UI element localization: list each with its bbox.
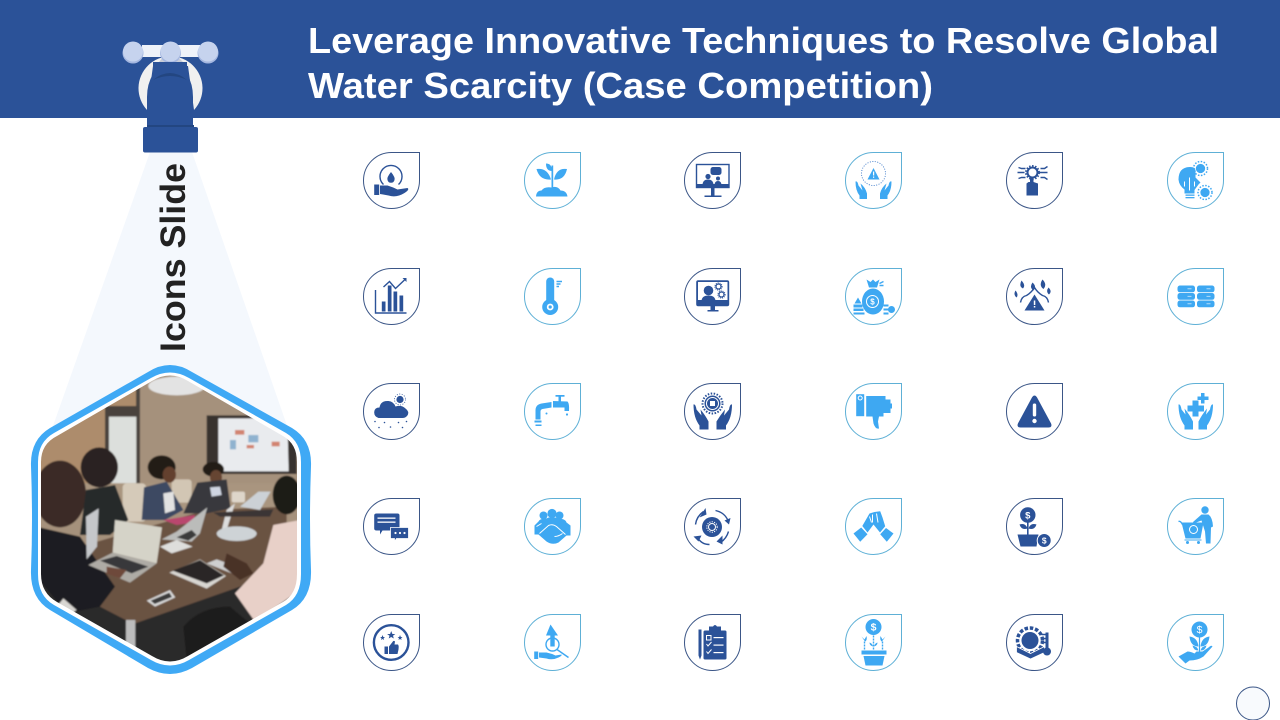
icon: hands with medical cross — [1168, 384, 1224, 440]
hexagon photo frame — [30, 365, 311, 674]
icon: money plant in pot — [1006, 498, 1062, 554]
icon: dollar plant pot — [846, 614, 902, 670]
icon: money bag: $ — [870, 298, 875, 306]
icon: thumbs down — [846, 384, 902, 440]
page number circle — [1236, 687, 1270, 720]
icon: dripping tap — [524, 384, 580, 440]
icon: person with shopping cart — [1168, 498, 1224, 554]
icon: monitor with video call — [684, 152, 740, 208]
title: Water Scarcity (Case Competition) — [308, 65, 933, 106]
title — [308, 20, 1219, 106]
icon: bar chart with trend arrow — [364, 268, 420, 324]
icon: hand with upward arrow and magnifier — [524, 614, 580, 670]
icon: thermometer — [524, 268, 580, 324]
side heading: Icons Slide — [154, 163, 193, 352]
icon: sprout — [524, 152, 580, 208]
icon: warning triangle — [1006, 384, 1062, 440]
icon: light bulb with gears — [1168, 152, 1224, 208]
icon: cloud with sun and rain — [364, 384, 420, 440]
icon: rating thumbs up — [364, 614, 420, 670]
icon: clasped hands — [846, 498, 902, 554]
icon: gear with thermometer — [1006, 614, 1062, 670]
icon: hands holding chip gear — [684, 384, 740, 440]
icon: dollar plant pot: $ — [871, 622, 877, 634]
icon: hand holding water drop — [364, 152, 420, 208]
icon: database server — [1168, 268, 1224, 324]
photo: team meeting — [41, 376, 297, 662]
icon: money plant in pot: $ — [1025, 510, 1031, 522]
icon: money bag — [846, 268, 902, 324]
icon: water alert — [1006, 268, 1062, 324]
icon: money plant in pot: $ — [1042, 536, 1047, 546]
icon: hand holding dollar plant — [1168, 614, 1224, 670]
title: Leverage Innovative Techniques to Resolve Global — [308, 20, 1219, 61]
icon: hands with warning — [846, 152, 902, 208]
light beam — [48, 152, 292, 440]
icon: cycle arrows with gear — [684, 498, 740, 554]
icon: clipboard checklist — [684, 614, 740, 670]
icon: chat bubbles — [364, 498, 420, 554]
icon: hand holding dollar plant: $ — [1197, 624, 1203, 636]
header band — [0, 0, 1280, 118]
icon: team handshake — [524, 498, 580, 554]
icon: finger touching gear circuit — [1006, 152, 1062, 208]
icon grid — [364, 152, 1224, 670]
icon: monitor with support agent — [684, 268, 740, 324]
icon: water faucet — [122, 42, 218, 152]
